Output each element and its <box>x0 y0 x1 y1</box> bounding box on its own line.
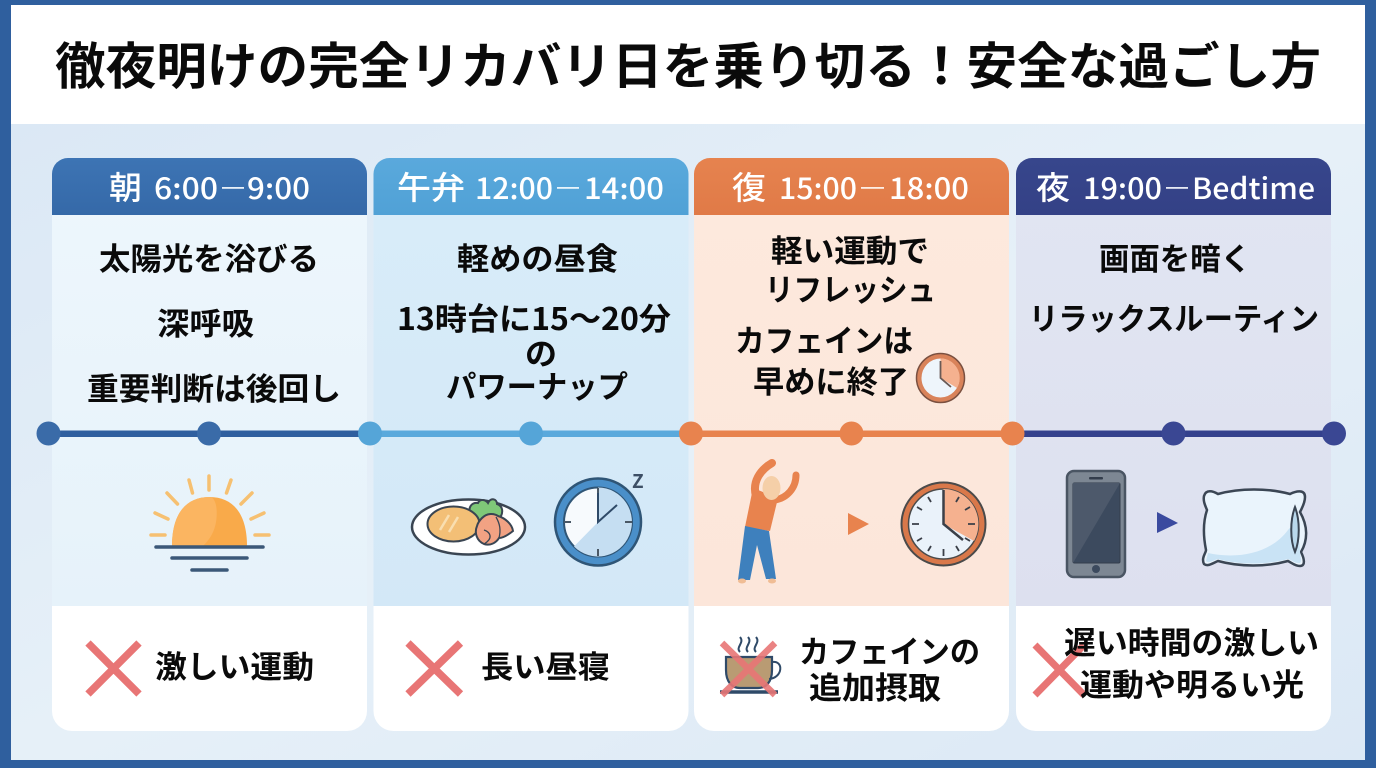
noon activities: 軽めの昼食 <box>457 234 618 279</box>
icon: cross <box>1035 645 1084 695</box>
afternoon activities: カフェインは <box>735 316 913 361</box>
noon activities: の <box>525 329 557 374</box>
evening header: 夜 <box>1036 163 1070 209</box>
morning activities <box>87 234 341 409</box>
afternoon activities: 軽い運動で <box>771 226 929 271</box>
noon header: 14:00 <box>584 166 664 208</box>
afternoon header: 18:00 <box>889 166 969 208</box>
morning activities: 重要判断は後回し <box>87 364 341 409</box>
avoid text: 激しい運動 <box>155 642 314 687</box>
afternoon header: 15:00 <box>779 166 857 208</box>
morning header: 6:00 <box>154 166 218 208</box>
noon activities: 13時台に15〜20分 <box>397 294 671 339</box>
evening header: 19:00 <box>1083 166 1162 208</box>
afternoon avoid card <box>694 606 1009 731</box>
icon: small clock <box>916 354 964 402</box>
title banner <box>11 5 1365 124</box>
morning header: 朝 <box>109 163 142 209</box>
afternoon activities <box>735 226 936 402</box>
avoid text: 運動や明るい光 <box>1080 660 1304 705</box>
icon: cross <box>88 643 139 694</box>
afternoon header: 復 <box>732 163 766 209</box>
title banner: 徹夜明けの完全リカバリ日を乗り切る！安全な過ごし方 <box>55 27 1321 99</box>
icon: nap clock <box>555 467 644 566</box>
noon header: 午弁 <box>397 163 465 209</box>
noon activities: パワーナップ <box>446 362 628 407</box>
noon header <box>374 158 688 215</box>
morning header <box>52 158 367 215</box>
panel: afternoon <box>694 158 1009 731</box>
noon activities <box>397 234 671 407</box>
evening header: Bedtime <box>1192 166 1315 208</box>
avoid text: 長い昼寝 <box>481 642 610 687</box>
noon avoid card <box>374 606 688 731</box>
panel: evening <box>1016 158 1331 731</box>
panel: noon <box>374 158 688 731</box>
icon: cross <box>408 643 460 694</box>
afternoon avoid card: 追加摂取 <box>809 663 941 708</box>
avoid text: 遅い時間の激しい <box>1064 618 1319 663</box>
icon: sunrise <box>151 476 269 570</box>
icon: coffee cup crossed <box>720 637 780 695</box>
evening activities: リラックスルーティン <box>1029 294 1319 339</box>
icon: lunch plate <box>412 499 525 554</box>
timeline <box>36 422 1346 446</box>
morning header: 9:00 <box>247 166 310 208</box>
arrow <box>1157 512 1178 533</box>
icon: stretching person <box>738 463 796 584</box>
icon: phone <box>1067 471 1125 577</box>
avoid text: カフェインの <box>799 627 980 672</box>
afternoon activities: リフレッシュ <box>765 265 936 310</box>
afternoon activities: 早めに終了 <box>753 357 909 402</box>
evening avoid card <box>1016 606 1331 731</box>
morning avoid card <box>52 606 367 731</box>
evening header <box>1016 158 1331 215</box>
icon: pillow <box>1203 490 1306 566</box>
evening activities: 画面を暗く <box>1099 234 1251 279</box>
morning activities: 深呼吸 <box>157 299 254 344</box>
icon: afternoon clock <box>902 482 986 566</box>
noon header: 12:00 <box>475 166 553 208</box>
evening activities <box>1029 234 1319 339</box>
morning activities: 太陽光を浴びる <box>99 234 319 279</box>
panel: morning <box>52 158 367 731</box>
avoid text <box>1064 618 1319 705</box>
arrow <box>848 513 869 535</box>
afternoon header <box>694 158 1009 215</box>
nap z: Z <box>632 467 644 494</box>
